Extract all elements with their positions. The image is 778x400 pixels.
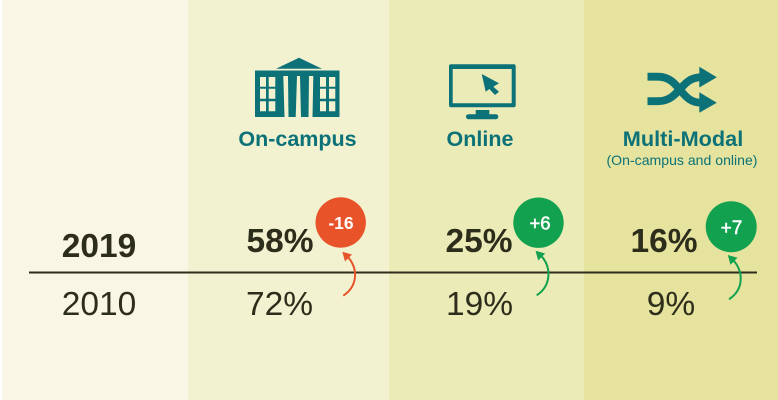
- badge: multi-modal change: +7: [721, 218, 742, 239]
- panel: on-campus: [188, 0, 389, 400]
- value: multi-modal 2019: 16%: [630, 223, 698, 260]
- value: online 2019: 25%: [445, 223, 513, 260]
- arrow: online change: [536, 251, 548, 295]
- heading: multi-modal: Multi-Modal: [623, 126, 743, 151]
- badge: on-campus change: [316, 197, 366, 248]
- panel: multi-modal: [584, 0, 778, 400]
- value: on-campus 2019: 58%: [246, 223, 314, 260]
- badge: online change: +6: [529, 212, 551, 234]
- label: 2019: 2019: [62, 228, 136, 265]
- badge: on-campus change: -16: [328, 213, 354, 233]
- badge: multi-modal change: [706, 201, 757, 252]
- panel: online: [389, 0, 584, 400]
- badge: online change: [513, 198, 564, 248]
- heading: on-campus: On-campus: [238, 127, 357, 151]
- subheading: multi-modal note: (On-campus and online): [606, 152, 758, 168]
- icon: shuffle arrows: [648, 67, 717, 113]
- value: online 2010: 19%: [446, 286, 513, 323]
- divider axis: [29, 272, 757, 274]
- value: on-campus 2010: 72%: [246, 286, 313, 323]
- arrow: multi-modal change: [728, 255, 741, 299]
- icon: computer monitor: [449, 64, 516, 119]
- heading: online: Online: [447, 127, 513, 151]
- label: 2010: 2010: [62, 286, 136, 323]
- arrow: on-campus change: [342, 252, 355, 296]
- icon: campus building: [255, 58, 340, 117]
- value: multi-modal 2010: 9%: [647, 286, 695, 323]
- panel: year labels: [2, 0, 188, 400]
